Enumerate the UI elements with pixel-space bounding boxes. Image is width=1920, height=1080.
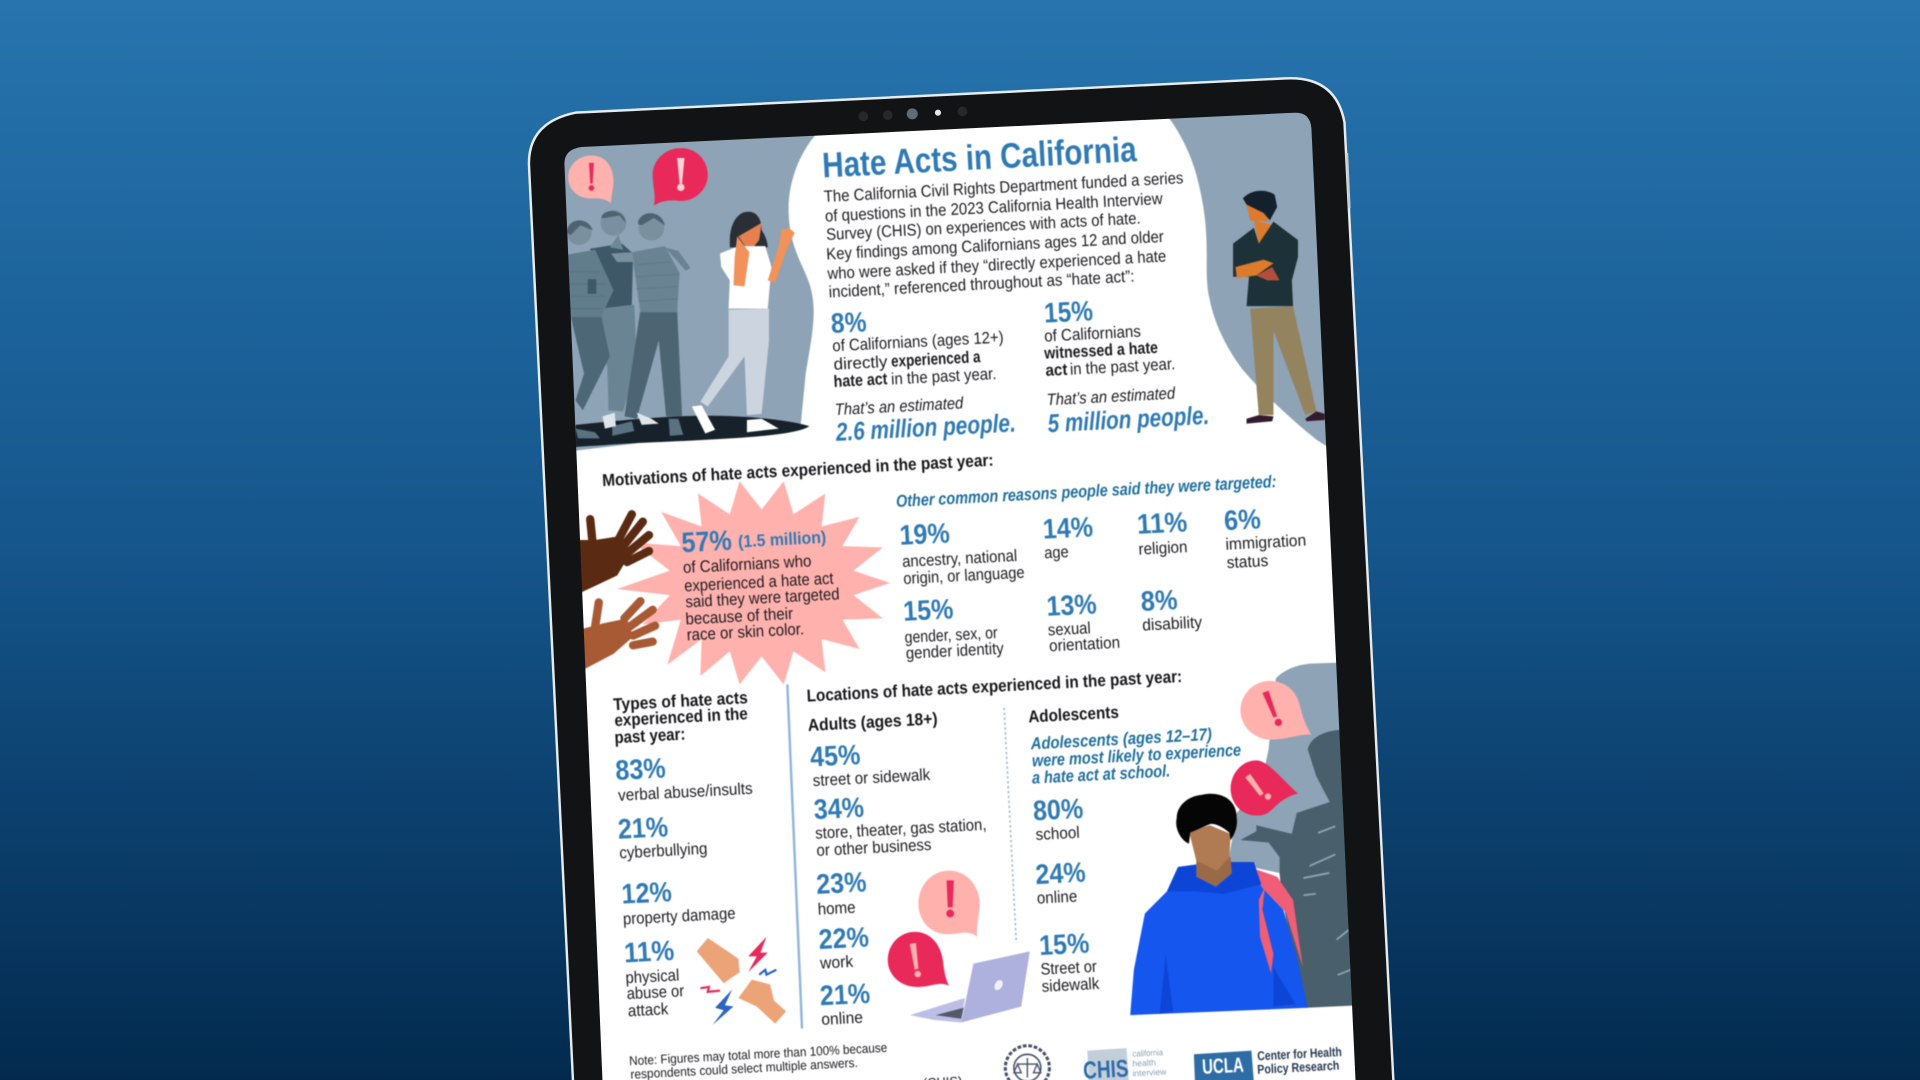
stats: adults locations: 21% [819,978,871,1011]
stats: adolescents locations: online [1036,887,1078,908]
icon: dark hand [576,514,649,595]
panel: left grey backdrop [557,132,818,451]
stat: 15% witnessed: witnessed a hate [1043,338,1158,363]
stats: adults locations: store, theater, gas station, [815,815,987,843]
stat: 8% experienced: That’s an estimated [834,393,964,419]
stats: other reasons: orientation [1049,633,1121,655]
stat: 8% experienced: in the past year. [891,364,997,388]
logo: UCLA Center for Health Policy Research [1194,1044,1342,1080]
footnote: Note: Figures may total more than 100% because [629,1040,888,1068]
stats: adults locations: 45% [809,739,861,773]
icon: red alert bubble adults [888,932,949,987]
callout: adolescents at school: were most likely to experience [1031,740,1242,771]
logo: CHIS: california [1132,1047,1164,1059]
stat: 15% witnessed: That’s an estimated [1046,384,1176,409]
stats: adolescents locations: school [1035,823,1080,844]
heading: types of hate acts: Types of hate acts [613,687,748,714]
stats: other reasons: gender identity [905,639,1005,663]
heading: types of hate acts: experienced in the [614,703,748,730]
logo: UCLA Center for Health Policy Research: Policy Research [1257,1058,1340,1077]
stat: 8% experienced: 8% [830,306,867,339]
icon: red alert bubble teen [1231,760,1298,816]
figure: group of bystanders [561,210,691,438]
stats: adolescents locations [1032,793,1100,996]
intro paragraph: of questions in the 2023 California Health Interview [825,189,1163,226]
stats: other reasons: disability [1142,612,1203,635]
stats: adults locations: 22% [818,921,870,955]
stat: 8% experienced: of Californians (ages 12+) [832,327,1004,355]
heading: adults: Adults (ages 18+) [807,708,938,735]
stat: 15% witnessed: of Californians [1044,322,1141,346]
callout: 57% burst: because of their [685,604,794,628]
panel: right grey backdrop [1169,112,1326,446]
icon: pink alert bubble adults [918,871,980,937]
ground shadow [576,416,809,447]
callout: 57% burst: (1.5 million) [738,527,827,551]
stats: other reasons: 19% [899,517,950,551]
stats: adults locations: 34% [813,792,865,825]
intro paragraph: incident,” referenced throughout as “hate act”: [828,267,1135,302]
stat: 15% witnessed: in the past year. [1069,354,1176,379]
figure: man with crossed arms [1233,191,1325,424]
stat: 8% experienced: experienced a [891,347,982,371]
heading: types of hate acts [613,687,748,747]
callout: 57% burst [617,481,890,684]
stats: adults locations [809,739,987,1029]
stats: adolescents locations: 24% [1035,856,1086,890]
stat: 8% experienced: directly [833,352,889,374]
stat: 15% witnessed: 15% [1043,295,1094,329]
logo: CHIS: interview [1132,1067,1167,1078]
stats: types [615,752,753,1020]
stats: other reasons: 11% [1136,506,1188,540]
callout: 57% burst: of Californians who [682,551,812,577]
heading: types of hate acts: past year: [614,724,686,747]
stats: adolescents locations: Street or [1040,957,1098,979]
stats: adults locations: or other business [816,835,932,860]
stats: adults locations: home [817,898,856,919]
footnote [629,1044,962,1080]
intro paragraph [823,168,1184,302]
heading: adolescents: Adolescents [1028,702,1119,726]
stats: other reasons: 14% [1042,511,1094,545]
stats: other reasons: 13% [1046,588,1097,622]
stats: other reasons: 6% [1223,503,1261,536]
intro paragraph: The California Civil Rights Department funded a series [823,168,1184,206]
callout: 57% burst: said they were targeted [685,584,840,611]
callout: adolescents at school [1029,724,1242,788]
divider: column rule [787,684,802,1029]
stats: adolescents locations: sidewalk [1041,974,1100,996]
stats: types: attack [627,999,669,1020]
stats: types: 83% [615,752,666,786]
stats: other reasons: 8% [1140,584,1178,617]
logo: CHIS: health [1132,1057,1156,1069]
stats: adults locations: online [821,1008,863,1029]
stats: other reasons: sexual [1047,618,1091,640]
callout: 57% burst: experienced a hate act [684,569,834,595]
stats: adults locations: work [819,952,854,973]
stats: other reasons: ancestry, national [902,546,1018,571]
stat: 8% experienced [830,306,1016,447]
stats: other reasons: origin, or language [903,563,1025,588]
stats: other reasons: religion [1138,537,1188,559]
stats: types: 21% [617,811,669,845]
panel: grey bullies backdrop [1228,662,1340,925]
icon: red alert bubble [653,148,708,206]
figure: shadow bullies [1240,729,1352,1008]
stats: types: verbal abuse/insults [618,779,753,805]
heading: motivations: Motivations of hate acts experienced in the past year: [602,450,994,490]
figure: adolescent in blue hoodie [1130,794,1308,1015]
figure: distressed woman [692,212,795,433]
logo: civil rights seal [1005,1046,1049,1080]
stats: types: 11% [623,935,675,968]
icon: pink alert bubble [568,156,613,203]
stats: types: physical [625,965,680,987]
tablet frame [529,78,1393,1080]
logo: UCLA Center for Health Policy Research: Center for Health [1257,1044,1342,1063]
title: Hate Acts in California [821,129,1138,186]
stats: other reasons: age [1044,542,1069,562]
subheading: other reasons: Other common reasons people said they were targeted: [895,471,1277,511]
heading: locations: Locations of hate acts experienced in the past year: [806,666,1183,706]
tablet side button [1347,153,1349,208]
stats: other reasons: gender, sex, or [904,623,998,647]
logo: CHIS [1083,1047,1167,1080]
stats: other reasons [899,503,1307,663]
icon: pink alert bubble teen [1240,681,1311,740]
stats: other reasons: immigration [1225,531,1307,554]
intro paragraph: who were asked if they “directly experienced a hate [826,246,1167,283]
screen page [576,118,1356,1080]
stats: types: cyberbullying [619,839,708,862]
callout: adolescents at school: Adolescents (ages 12–17) [1029,724,1212,753]
stats: types: property damage [622,904,736,928]
intro paragraph: Key findings among Californians ages 12 and older [826,227,1165,264]
stat: 8% experienced: 2.6 million people. [834,409,1016,447]
stat: 8% experienced: hate act [833,369,888,391]
stats: types: 12% [621,876,672,910]
camera dots [858,107,967,121]
stat: 15% witnessed [1043,295,1210,438]
callout: 57% burst: 57% [681,525,732,558]
infographic screen [564,112,1356,1080]
callout: adolescents at school: a hate act at school. [1031,760,1171,788]
intro paragraph: Survey (CHIS) on experiences with acts of hate. [826,209,1141,244]
stats: types: abuse or [626,981,685,1003]
icon: brown hand [580,601,655,671]
stats: other reasons: status [1226,551,1269,572]
stat: 15% witnessed: 5 million people. [1047,402,1210,438]
stats: other reasons: 15% [902,593,954,627]
icon: laptop [910,951,1030,1022]
stats: adolescents locations: 80% [1032,793,1084,826]
divider: dotted column rule [1004,708,1016,943]
logo: UCLA Center for Health Policy Research: UCLA [1202,1054,1244,1079]
stats: adults locations: 23% [815,866,867,900]
stats: adults locations: street or sidewalk [812,765,931,790]
stats: adolescents locations: 15% [1038,928,1090,961]
icon: fist bump with lightning [697,937,786,1025]
stat: 15% witnessed: act [1045,360,1068,380]
callout: 57% burst: race or skin color. [686,619,805,644]
